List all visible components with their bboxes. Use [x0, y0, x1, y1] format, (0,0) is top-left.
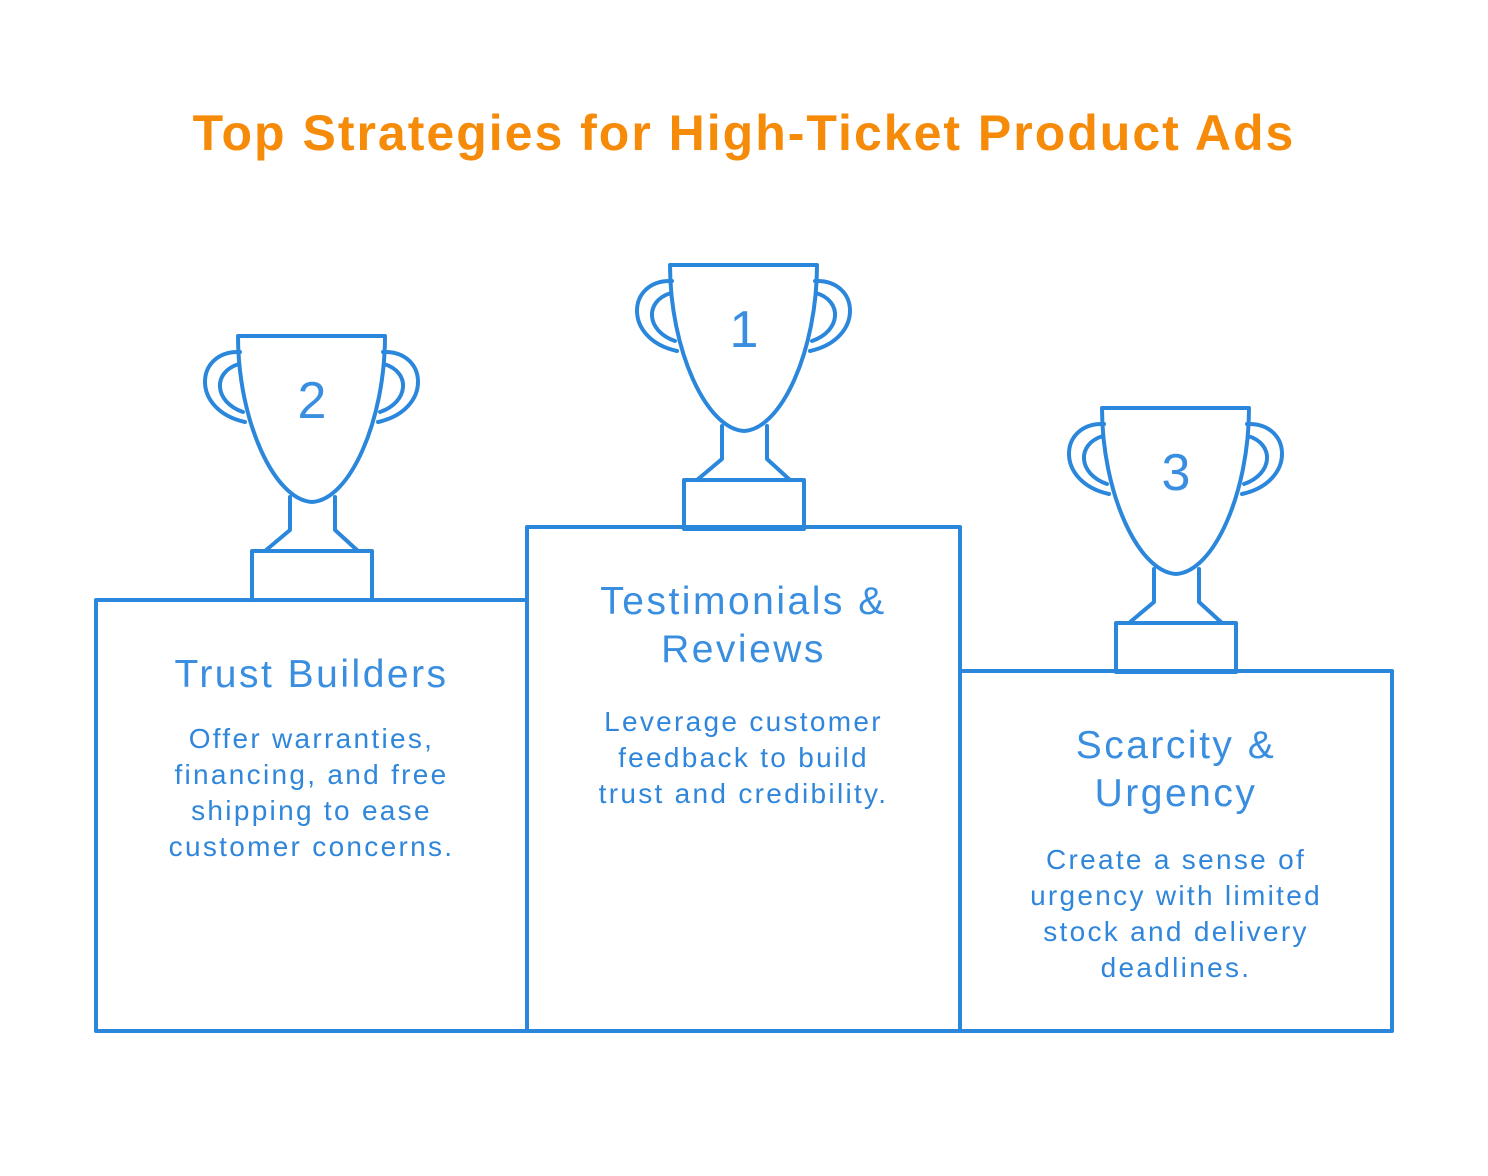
- title: Top Strategies for High-Ticket Product Ads: [193, 105, 1295, 161]
- text: Trust Builders: Offer warranties,: [189, 723, 434, 754]
- heading: Trust Builders: Trust Builders: [174, 653, 449, 696]
- heading: Scarcity: Urgency: [1095, 772, 1257, 815]
- text: Testimonials: [599, 706, 888, 809]
- heading: Testimonials: [600, 580, 887, 671]
- podium: middle box: [527, 527, 960, 1031]
- heading: Testimonials: Reviews: [661, 628, 826, 671]
- trophy 2: 2: [298, 372, 326, 430]
- text: Testimonials: Leverage customer: [604, 706, 883, 737]
- trophy 3: 3: [1162, 444, 1190, 502]
- trophy 1: 1: [730, 301, 758, 359]
- text: Trust Builders: financing, and free: [174, 759, 449, 790]
- heading: Scarcity: Scarcity &: [1076, 724, 1276, 767]
- text: Testimonials: feedback to build: [618, 742, 869, 773]
- trophy 1: [637, 265, 850, 529]
- trophy 3: [1069, 408, 1282, 672]
- text: Scarcity: deadlines.: [1101, 952, 1251, 983]
- text: Scarcity: [1030, 844, 1322, 983]
- heading: Scarcity: [1076, 724, 1276, 815]
- podium: right box: [960, 671, 1392, 1031]
- heading: Testimonials: Testimonials &: [600, 580, 887, 623]
- text: Trust Builders: customer concerns.: [169, 831, 454, 862]
- text: Trust Builders: shipping to ease: [191, 795, 432, 826]
- text: Scarcity: stock and delivery: [1043, 916, 1309, 947]
- trophy 2: [205, 336, 418, 600]
- text: Testimonials: trust and credibility.: [599, 778, 888, 809]
- podium: left box: [96, 600, 527, 1031]
- text: Trust Builders: [169, 723, 454, 862]
- text: Scarcity: urgency with limited: [1030, 880, 1322, 911]
- text: Scarcity: Create a sense of: [1046, 844, 1306, 875]
